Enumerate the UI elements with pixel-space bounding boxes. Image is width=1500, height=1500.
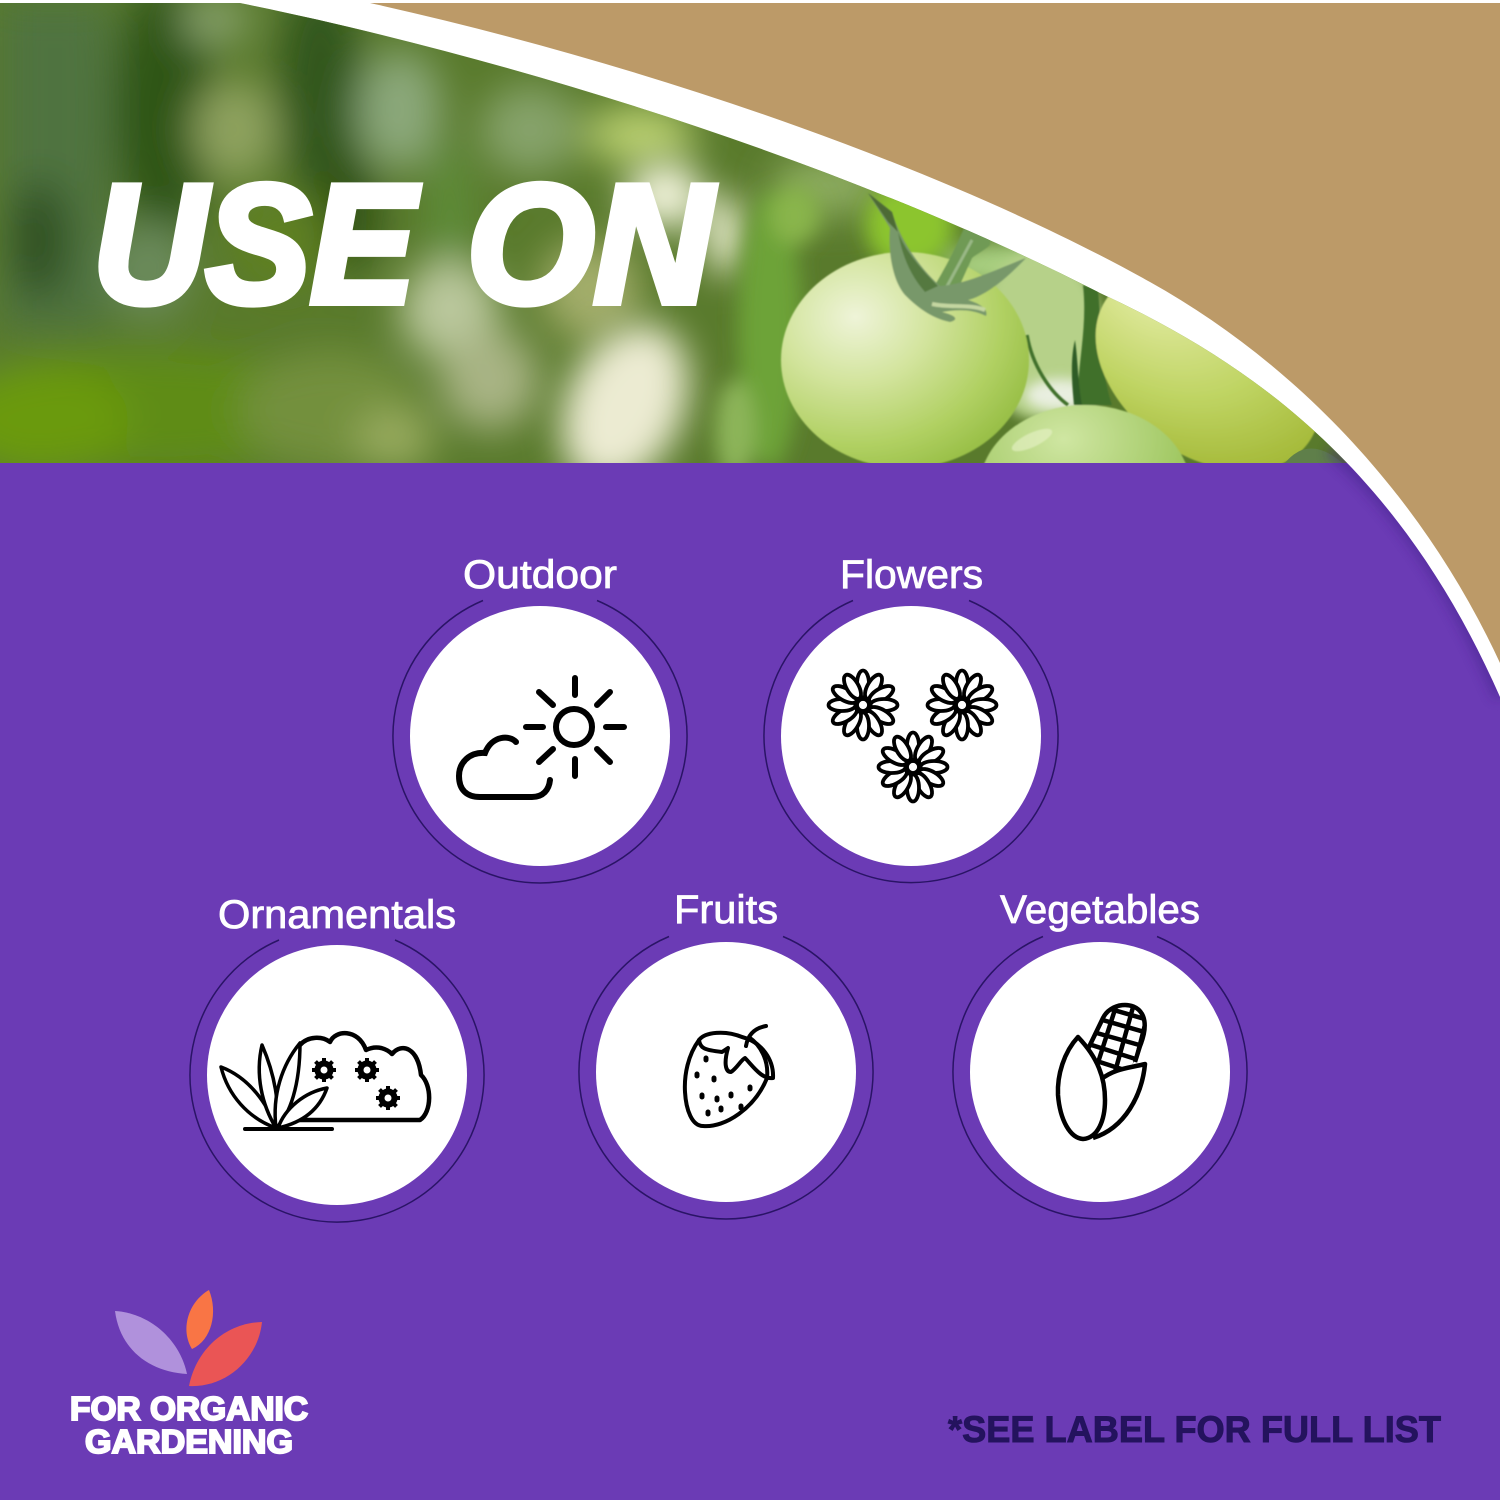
label: Flowers: Flowers [840,553,983,597]
logo: For Organic Gardening: GARDENING [85,1423,293,1460]
circle: Flowers [781,606,1041,866]
item: Fruits [579,888,873,1219]
bottom-right foliage [1285,448,1342,463]
label: Ornamentals: Ornamentals [218,893,456,937]
circle: Vegetables [970,942,1230,1202]
circle: Fruits [596,942,856,1202]
icon: shrub and leaves [221,1033,429,1129]
icon: purple leaf [115,1311,187,1374]
ring: Ornamentals [190,940,484,1222]
tomato: right [1094,296,1316,463]
label: Outdoor: Outdoor [463,553,617,597]
item: Vegetables [953,888,1247,1219]
logo: For Organic Gardening [70,1290,308,1460]
circle: Ornamentals [207,945,467,1205]
tomato: main [781,252,1029,468]
icon: corn [1058,1000,1155,1139]
panel: purple content area [0,450,1500,1500]
item: Flowers [764,553,1058,883]
ring: Fruits [579,936,873,1219]
title: ON [467,150,716,338]
stems behind tomatoes [1078,285,1112,405]
footnote: *SEE LABEL FOR FULL LIST [948,1409,1441,1450]
circle: Outdoor [410,606,670,866]
label: Fruits: Fruits [674,888,778,932]
ring: Vegetables [953,936,1247,1219]
icon: three daisies [828,670,996,802]
tomato stem [936,228,990,287]
tomato calyx [868,193,1026,322]
title: USE [93,150,420,338]
soft bokeh highlights [537,161,745,507]
panel: tan corner shape [370,3,1500,663]
panel: tomato photo header [0,3,1347,463]
tomato: background pale [995,253,1104,423]
label: Vegetables: Vegetables [1000,888,1200,932]
logo text: FOR ORGANIC [70,1390,308,1427]
tomato: bottom [984,404,1186,463]
ring: Flowers [764,600,1058,883]
ring: Outdoor [393,600,687,883]
icon: strawberry [685,1026,773,1126]
item: Ornamentals [190,893,484,1222]
icon: sun and cloud [459,678,624,797]
item: Outdoor [393,553,687,883]
icon: red leaf [189,1322,262,1386]
icon: orange leaf [186,1290,213,1349]
